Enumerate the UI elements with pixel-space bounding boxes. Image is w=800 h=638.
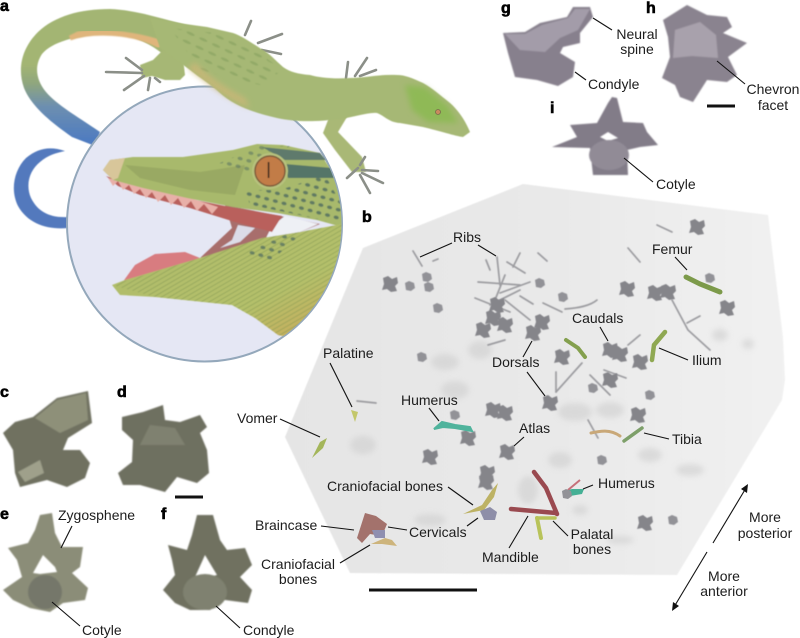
white inner mouth [266,216,318,238]
ribs [357,225,710,438]
throat speckles [249,235,296,260]
caudal green bone [566,340,585,357]
body orange flank [188,62,250,108]
inset circle [67,86,342,362]
callout: Zygosphene [58,507,135,548]
callout: Caudals [572,310,623,341]
tibia [591,428,642,441]
callout: Condyle g [575,72,640,92]
callout: Neural spine: spine [620,41,654,57]
callout: Chevron facet [717,61,799,113]
callout: Humerus right: Humerus [598,475,655,491]
vertebra g [503,7,593,86]
callout: Palatal bones: bones [573,541,611,557]
callout: Braincase [255,517,354,533]
vertebra h [662,5,747,102]
callout: Craniofacial bones lower: bones [279,571,317,587]
inset: lizard head close-up [103,144,345,340]
tail orange underside [70,33,160,46]
callout: Condyle f: Condyle [243,622,295,638]
callout: Condyle f [216,606,295,638]
braincase [357,513,387,543]
callout: Femur [652,241,693,270]
far fore foot toes [346,58,376,78]
callout: Ilium [659,348,722,368]
arrow: more posterior: More [749,509,781,525]
arrow: more anterior: anterior [700,583,748,599]
panels c-f: vertebra views [0,384,252,612]
callout: Humerus left [401,392,458,421]
vertebra i [552,97,658,175]
callout: Cotyle e: Cotyle [82,622,122,638]
rock slab [285,184,785,575]
callout: Chevron facet: Chevron [747,81,799,97]
eye [252,153,288,189]
head speckles [246,177,341,220]
craniofacial bones slab left [371,538,397,546]
callout: Cervicals [388,518,478,540]
humerus teal [434,422,472,431]
scale bar h [707,104,735,108]
panel letter h: h [646,0,656,17]
panel a: lizard illustration [0,0,470,362]
upper jaw [103,144,342,227]
callout: Palatine: Palatine [323,345,374,361]
callout: Mandible: Mandible [482,549,539,565]
panel letter i: i [550,100,554,117]
callout: Condyle g: Condyle [588,76,640,92]
vertebra d [118,405,209,492]
lizard body [150,18,470,137]
callout: Tibia [644,431,702,447]
callout: Ilium: Ilium [692,352,722,368]
vertebra c [3,391,92,487]
small eye [436,110,440,114]
near hind foot toes [106,58,160,90]
dark eye stripes [285,164,334,178]
lower jaw and throat [112,224,345,340]
blue tail curl [14,148,68,228]
callout: Chevron facet: facet [758,97,788,113]
callout: Palatine [323,345,374,407]
panel letter b: b [362,209,372,226]
cervicals [480,507,497,520]
callout: Dorsals: Dorsals [492,354,539,370]
callout: Cervicals: Cervicals [409,524,467,540]
callout: Cotyle i: Cotyle [656,176,696,192]
vertebra f [163,515,252,610]
femur bone [686,277,720,292]
vomer [312,438,327,458]
lizard tail [21,9,200,146]
panel letter e: e [0,506,9,523]
panel letter f: f [161,506,167,523]
callout: Dorsals [492,341,545,396]
panel letter c: c [0,384,9,401]
arrow: more posterior [713,484,793,543]
rock texture blotches [350,329,754,544]
callout: Palatal bones [553,521,613,557]
palatine [351,410,358,422]
callout: Craniofacial bones lower: Craniofacial [261,556,335,572]
callout: Vomer: Vomer [237,410,278,426]
callout: Atlas: Atlas [519,420,550,436]
callout: Atlas [514,420,550,446]
tongue [122,252,200,283]
near fore leg [323,112,366,172]
callout: Femur: Femur [652,241,693,257]
callout: Ribs: Ribs [453,229,481,245]
scale bar c-d [175,496,203,498]
scale bar b [369,588,477,592]
callout: Cotyle e [52,602,122,638]
callout: Craniofacial bones centre [327,478,473,505]
callout: Craniofacial bones centre: Craniofacial bones [327,478,443,494]
callout: Tibia: Tibia [672,431,702,447]
gray vertebrae fragments [382,219,735,531]
far hind foot toes [245,21,282,54]
callout: Neural spine: Neural [616,26,658,42]
callout: Palatal bones: Palatal [571,526,613,542]
callout: Cotyle i [624,158,696,192]
arrow: more anterior [672,552,748,611]
arrow: more anterior: More [708,568,740,584]
callout: Zygosphene: Zygosphene [58,507,135,523]
callout: Braincase: Braincase [255,517,317,533]
near hind leg [140,48,185,80]
vertebra e [3,513,88,612]
callout: Ribs [420,229,496,257]
callout: Mandible [482,516,539,565]
callout: Craniofacial bones lower [261,545,370,587]
arrow: more posterior: posterior [738,525,793,541]
craniofacial bones centre [463,483,498,514]
palatal bones [537,518,555,538]
callout: Humerus left: Humerus [401,392,458,408]
panel letter d: d [117,384,127,401]
callout: Vomer [237,410,320,437]
body mottling [170,28,283,85]
ilium bone [652,332,665,360]
callout: Caudals: Caudals [572,310,623,326]
panel letter g: g [501,0,511,17]
right humerus cluster [562,480,584,499]
callout: Neural spine [593,18,658,57]
panel b: fossil slab [285,184,785,575]
head green patch [405,85,458,123]
mouth interior [200,205,320,258]
red gum and teeth [106,176,282,232]
mandible [511,472,557,514]
panels g-i: caudal vertebra views [501,0,747,175]
near fore foot toes [347,157,383,193]
